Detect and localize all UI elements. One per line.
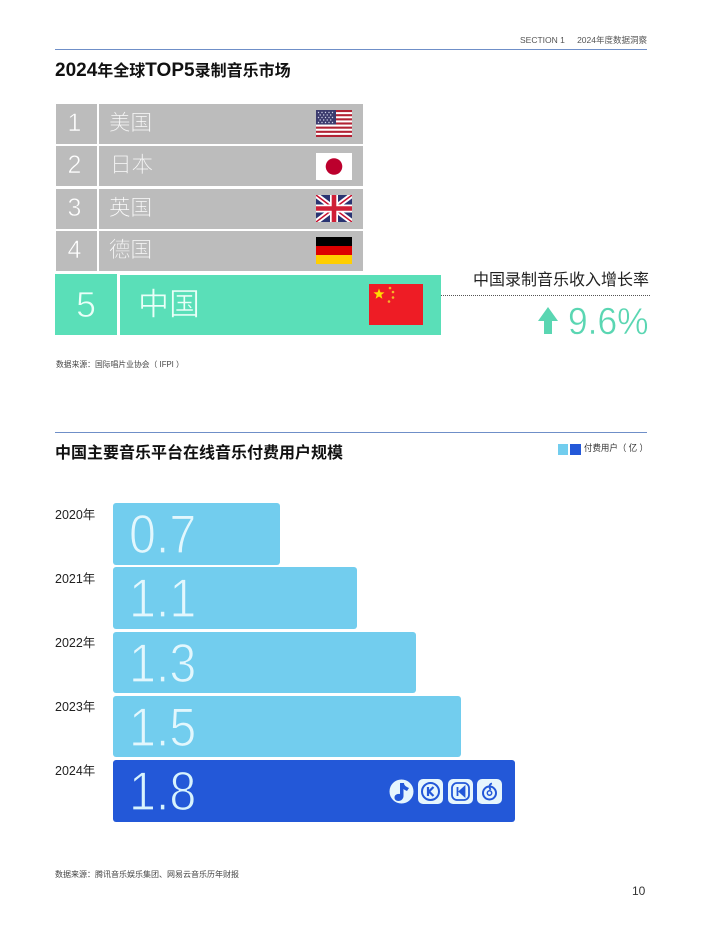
icon: Kuwo	[448, 779, 473, 804]
rank 1 name: 美国	[109, 111, 152, 135]
bar 2024: 1.8	[129, 760, 196, 822]
heading: top 5 markets: 2024年全球TOP5录制音乐市场	[55, 60, 291, 81]
rank 2 number: 2	[68, 151, 81, 179]
rows: grey rank background	[56, 104, 363, 271]
icon group: music platforms	[390, 779, 502, 804]
callout: revenue growth	[441, 271, 650, 343]
callout value: 9.6%	[568, 301, 649, 343]
legend: 付费用户（ 亿 ）	[584, 443, 648, 453]
bar 2020: 0.7	[129, 503, 196, 565]
bar 2020	[113, 503, 280, 565]
bar 2023	[113, 696, 461, 757]
icon: Japan flag	[316, 153, 352, 180]
icon: US flag	[316, 110, 352, 137]
section header: 2024年度数据洞察	[577, 35, 647, 45]
section header	[520, 35, 647, 45]
rank 5 number: 5	[76, 284, 96, 325]
heading: paying users: 中国主要音乐平台在线音乐付费用户规模	[55, 445, 343, 462]
section header: SECTION 1	[520, 35, 565, 45]
icon: Kugou	[418, 779, 443, 804]
callout label: 中国录制音乐收入增长率	[473, 272, 649, 289]
panel: ranking list	[55, 104, 441, 335]
bar 2021	[113, 567, 357, 629]
year label 2022: 2022年	[55, 636, 95, 650]
rank 2 name: 日本	[110, 153, 153, 177]
icon: Germany flag	[316, 237, 352, 264]
page number: 10	[632, 884, 645, 898]
rank 1 number: 1	[68, 109, 81, 137]
year label 2023: 2023年	[55, 700, 95, 714]
bar 2022	[113, 632, 416, 693]
bar 2023: 1.5	[129, 696, 196, 758]
source note: paying users: 数据来源：腾讯音乐娱乐集团、网易云音乐历年财报	[55, 870, 239, 879]
year label 2020: 2020年	[55, 508, 95, 522]
rank 4 number: 4	[68, 236, 81, 264]
legend	[558, 443, 648, 455]
bar 2024	[113, 760, 515, 822]
rank 3 number: 3	[68, 194, 81, 222]
icon: NetEase cloud music	[477, 779, 502, 804]
icon: UK flag	[316, 195, 352, 222]
source note: top 5: 数据来源：国际唱片业协会（ IFPI ）	[56, 360, 184, 369]
rank 3 name: 英国	[109, 196, 152, 220]
rank 5 name: 中国	[138, 287, 200, 322]
rank 5 highlighted row background	[55, 274, 441, 335]
callout dotted leader	[441, 295, 650, 296]
bar 2021: 1.1	[129, 567, 196, 629]
year label 2021: 2021年	[55, 572, 95, 586]
icon: China flag	[369, 284, 423, 325]
year label 2024: 2024年	[55, 764, 95, 778]
rank 4 name: 德国	[109, 238, 152, 262]
icon: QQ music	[390, 780, 414, 804]
bar 2022: 1.3	[129, 632, 196, 694]
icon: up arrow	[538, 307, 558, 334]
